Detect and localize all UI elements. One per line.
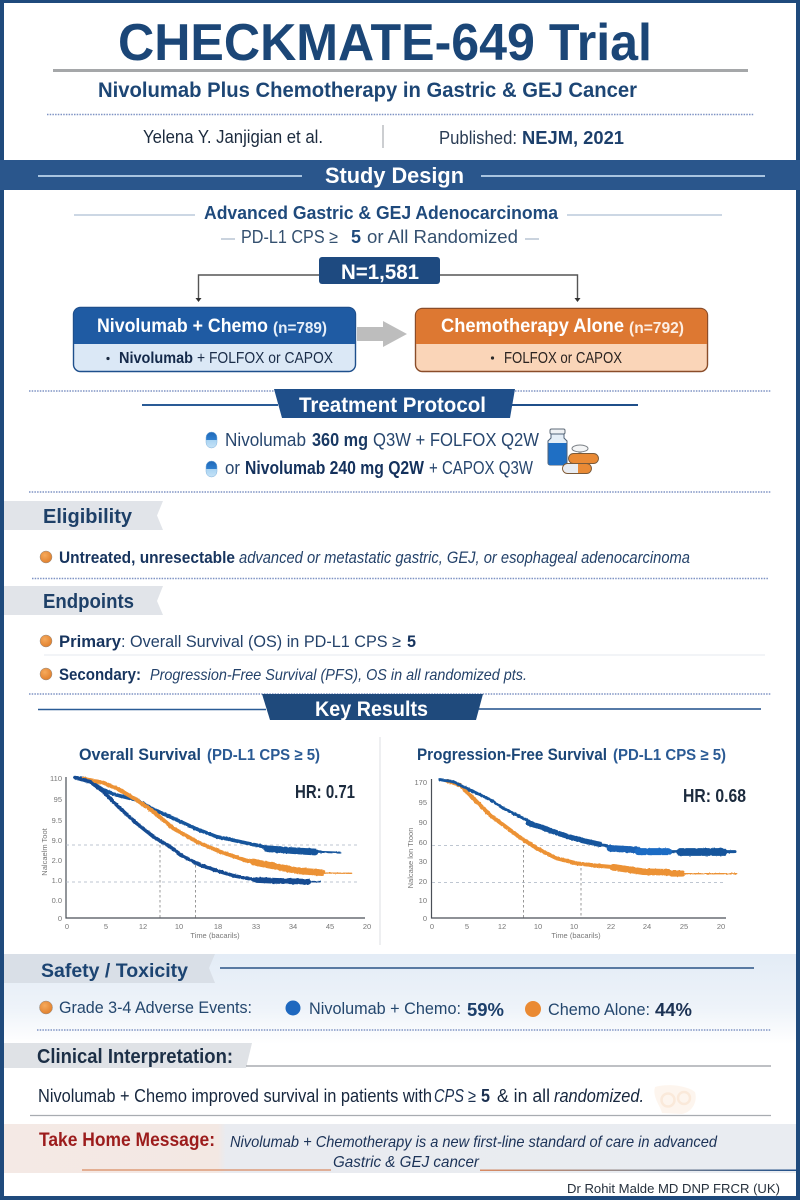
x tick labels: 20	[717, 922, 725, 931]
y tick labels: 30	[419, 857, 427, 866]
x tick labels: 45	[326, 922, 334, 931]
secondary endpoint: Progression-Free Survival (PFS), OS in all randomized pts.	[150, 667, 527, 684]
y tick labels	[414, 778, 427, 923]
hazard ratio: HR: 0.68	[683, 786, 746, 806]
x tick labels: 20	[363, 922, 371, 931]
adverse events row: Nivolumab + Chemo:	[309, 999, 461, 1018]
chart title: Overall Survival	[79, 745, 201, 764]
publication: Published:	[439, 128, 517, 148]
signature: Dr Rohit Malde MD DNP FRCR (UK)	[567, 1181, 780, 1196]
sample size box: N=1,581	[341, 261, 419, 284]
adverse events row	[40, 998, 692, 1020]
axes	[66, 777, 365, 918]
authors: Yelena Y. Janjigian et al.	[143, 127, 323, 147]
tab: eligibility: Eligibility	[43, 506, 133, 528]
subtitle: Nivolumab Plus Chemotherapy in Gastric & GEJ Cancer	[98, 79, 637, 102]
publication	[439, 128, 624, 148]
y tick labels	[50, 774, 62, 923]
randomisation connector	[196, 275, 580, 302]
tab: eligibility	[4, 501, 163, 530]
y tick labels: 110	[50, 774, 62, 783]
axis titles: Time (bacarils)	[551, 931, 601, 940]
population heading: PD-L1 CPS ≥	[241, 227, 338, 247]
x tick labels: 12	[498, 922, 506, 931]
adverse events row: 44%	[655, 1000, 692, 1020]
y tick labels: 10	[419, 896, 427, 905]
protocol regimen two: + CAPOX Q3W	[429, 458, 533, 478]
y tick labels: 95	[54, 795, 62, 804]
chart title	[417, 745, 726, 764]
secondary endpoint: Secondary:	[59, 665, 141, 684]
arm: nivolumab + chemo	[74, 308, 356, 372]
eligibility criterion	[40, 549, 690, 567]
y tick labels: 95	[419, 798, 427, 807]
title: CHECKMATE-649 Trial	[118, 14, 652, 72]
chart: progression-free survival: Nalcaae lon Ttoon	[406, 828, 415, 888]
y tick labels: 0.0	[52, 896, 62, 905]
x tick labels: 10	[534, 922, 542, 931]
axis titles: Time (bacarils)	[190, 931, 240, 940]
adverse events row: Grade 3-4 Adverse Events:	[59, 998, 252, 1017]
adverse events row: Chemo Alone:	[548, 1000, 650, 1019]
chart: progression-free survival	[406, 745, 746, 940]
band: study design: Study Design	[325, 163, 464, 188]
primary endpoint: : Overall Survival (OS) in PD-L1 CPS ≥	[121, 632, 401, 651]
adverse events row: 59%	[467, 1000, 504, 1020]
y tick labels: 0	[58, 914, 62, 923]
x tick labels: 12	[139, 922, 147, 931]
y tick labels: 60	[419, 838, 427, 847]
eligibility criterion: Untreated, unresectable	[59, 549, 235, 567]
population heading: or All Randomized	[367, 227, 518, 247]
panel: take home message: Nivolumab + Chemotherapy is a new first-line standard of care in advanced	[230, 1134, 718, 1151]
primary endpoint: 5	[407, 632, 416, 651]
icon: watermark	[654, 1085, 696, 1114]
protocol regimen two	[206, 458, 533, 478]
y tick labels: 1.0	[52, 876, 62, 885]
tab: endpoints: Endpoints	[43, 591, 134, 613]
protocol regimen two: or	[225, 458, 240, 478]
x tick labels: 0	[430, 922, 434, 931]
chart title: Progression-Free Survival	[417, 745, 607, 764]
x tick labels: 25	[680, 922, 688, 931]
y tick labels: 9.0	[52, 836, 62, 845]
icon: vial and pills	[548, 429, 598, 474]
x tick labels: 33	[252, 922, 260, 931]
clinical interpretation text: & in all	[497, 1086, 550, 1106]
x tick labels: 10	[175, 922, 183, 931]
header	[47, 14, 754, 148]
protocol regimen one: 360 mg	[312, 430, 368, 450]
arm: nivolumab + chemo: Nivolumab + Chemo	[97, 316, 268, 337]
tab: safety / toxicity: Safety / Toxicity	[41, 961, 188, 982]
arm: chemotherapy alone: Chemotherapy Alone	[441, 316, 624, 337]
survival curves	[440, 780, 737, 874]
panel: safety background	[4, 954, 796, 1044]
protocol regimen one: Nivolumab	[225, 430, 306, 450]
x tick labels: 24	[643, 922, 651, 931]
x tick labels: 5	[104, 922, 108, 931]
axes	[432, 779, 726, 918]
clinical interpretation text: 5	[481, 1086, 490, 1106]
population heading: 5	[351, 227, 361, 247]
x tick labels	[430, 922, 725, 931]
y tick labels: 170	[414, 778, 427, 787]
ribbon: key results	[38, 694, 761, 721]
chart title: (PD-L1 CPS ≥ 5)	[207, 747, 320, 764]
protocol regimen two: Nivolumab 240 mg Q2W	[245, 458, 424, 478]
hazard ratio: HR: 0.71	[295, 782, 355, 802]
chart title	[79, 745, 320, 764]
panel: take home message: Take Home Message:	[39, 1130, 215, 1151]
x tick labels: 10	[570, 922, 578, 931]
arrow between arms	[357, 321, 407, 347]
sample size box	[319, 257, 440, 284]
arm: nivolumab + chemo: Nivolumab	[119, 350, 193, 367]
eligibility criterion: advanced or metastatic gastric, GEJ, or esophageal adenocarcinoma	[239, 549, 690, 567]
chart: overall survival: Nalcaelm Toot	[40, 827, 49, 876]
x tick labels: 5	[465, 922, 469, 931]
arm: chemotherapy alone: FOLFOX or CAPOX	[504, 350, 622, 367]
ribbon: treatment protocol: Treatment Protocol	[299, 394, 486, 417]
panel: take home message: Gastric & GEJ cancer	[333, 1154, 480, 1171]
arm: chemotherapy alone: (n=792)	[629, 320, 684, 337]
band: study design	[0, 160, 800, 190]
survival curves	[75, 778, 352, 882]
x tick labels: 34	[289, 922, 297, 931]
y tick labels: 9.5	[52, 816, 62, 825]
arm: chemotherapy alone	[416, 308, 708, 372]
publication: NEJM, 2021	[522, 128, 624, 148]
y tick labels: 2.0	[52, 856, 62, 865]
panel: take home message	[4, 1124, 796, 1173]
population heading	[74, 203, 722, 247]
ribbon: key results: Key Results	[315, 698, 428, 721]
tab: safety / toxicity	[4, 954, 754, 983]
x tick labels: 22	[607, 922, 615, 931]
tab: clinical interpretation: Clinical Interpretation:	[37, 1046, 233, 1068]
ribbon: treatment protocol	[142, 389, 638, 418]
chart: overall survival	[40, 745, 371, 940]
arm: nivolumab + chemo: + FOLFOX or CAPOX	[197, 350, 333, 367]
clinical interpretation text: randomized.	[554, 1086, 644, 1106]
arm: nivolumab + chemo: (n=789)	[273, 320, 327, 337]
chart title: (PD-L1 CPS ≥ 5)	[613, 747, 726, 764]
x tick labels	[65, 922, 371, 931]
y tick labels: 0	[423, 914, 427, 923]
secondary endpoint	[40, 665, 527, 684]
population heading: Advanced Gastric & GEJ Adenocarcinoma	[204, 203, 559, 223]
protocol regimen one: Q3W + FOLFOX Q2W	[373, 430, 539, 450]
y tick labels: 20	[419, 877, 427, 886]
protocol regimen one	[206, 430, 539, 450]
y tick labels: 90	[419, 818, 427, 827]
tab: endpoints	[4, 586, 163, 615]
primary endpoint: Primary	[59, 632, 122, 651]
clinical interpretation text: CPS ≥	[434, 1086, 476, 1106]
x tick labels: 0	[65, 922, 69, 931]
tab: clinical interpretation	[4, 1043, 771, 1068]
x tick labels: 18	[214, 922, 222, 931]
clinical interpretation text: Nivolumab + Chemo improved survival in patients with	[38, 1086, 432, 1106]
